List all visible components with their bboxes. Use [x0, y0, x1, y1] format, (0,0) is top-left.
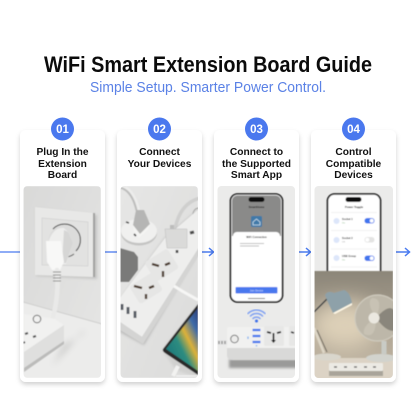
heading: step 4: Compatible: [326, 159, 382, 170]
subtitle: Simple Setup. Smarter Power Control.: [90, 80, 326, 96]
panel: step 2: [117, 118, 205, 382]
power strip: [329, 363, 383, 376]
scene: lamp and fan: [314, 270, 393, 378]
title: WiFi Smart Extension Board Guide: [44, 52, 372, 77]
badge: 01: [51, 118, 74, 140]
panel: step 3: [214, 118, 299, 382]
badge: 04: [342, 118, 365, 140]
heading: step 2: Connect: [139, 147, 180, 158]
arrow: into step 1: [0, 251, 20, 253]
heading: step 4: Devices: [334, 170, 373, 181]
photo: devices on power strip: [120, 185, 205, 378]
panel: step 4: [311, 118, 401, 382]
heading: step 1: Board: [48, 170, 77, 181]
heading: step 1: Plug In the: [36, 147, 89, 158]
heading: step 4: Control: [335, 147, 372, 158]
badge: 01: 01: [56, 124, 69, 136]
heading: step 3: Smart App: [231, 170, 282, 181]
phone: power toggle screen: Power Toggle: [345, 205, 364, 209]
phone: power toggle screen: On: [342, 222, 346, 224]
phone: power toggle screen: Socket 2: [342, 236, 353, 240]
badge: 02: 02: [153, 124, 166, 136]
badge: 04: 04: [347, 124, 360, 136]
arrow: step 2 to step 3: [202, 248, 214, 256]
icon: table fan: [354, 294, 393, 362]
icon: desk lamp: [313, 290, 352, 360]
phone: WiFi connection screen: SmartHome: [249, 205, 265, 209]
badge: 03: [245, 118, 268, 140]
phone: power toggle screen: On: [342, 260, 346, 262]
phone: power toggle screen: USB Group: [342, 254, 356, 258]
badge: 02: [148, 118, 171, 140]
photo: plug in wall socket: [23, 186, 102, 378]
phone: WiFi connection screen: Join Device: [250, 288, 264, 292]
phone: WiFi connection screen: WiFi Connection: [246, 235, 267, 239]
badge: 03: 03: [250, 124, 263, 136]
panel: step 1: [20, 118, 105, 382]
heading: step 3: the Supported: [222, 159, 291, 170]
power strip: [217, 326, 299, 368]
photo: app and controlled devices: [314, 186, 393, 378]
heading: step 3: Connect to: [230, 147, 283, 158]
heading: step 1: Extension: [38, 159, 87, 170]
icon: wifi: [248, 310, 265, 322]
phone: power toggle screen: Off: [342, 242, 345, 244]
phone: power toggle screen: Socket 1: [342, 217, 353, 221]
arrow: step 3 to step 4: [299, 248, 311, 256]
phone: power toggle screen: [328, 194, 380, 284]
arrow: step 1 to step 2: [105, 251, 117, 253]
phone: WiFi connection screen: [230, 194, 282, 302]
heading: step 2: Your Devices: [128, 159, 192, 170]
arrow: step 4 onward: [396, 248, 410, 256]
photo: app setup and strip: [217, 186, 299, 378]
